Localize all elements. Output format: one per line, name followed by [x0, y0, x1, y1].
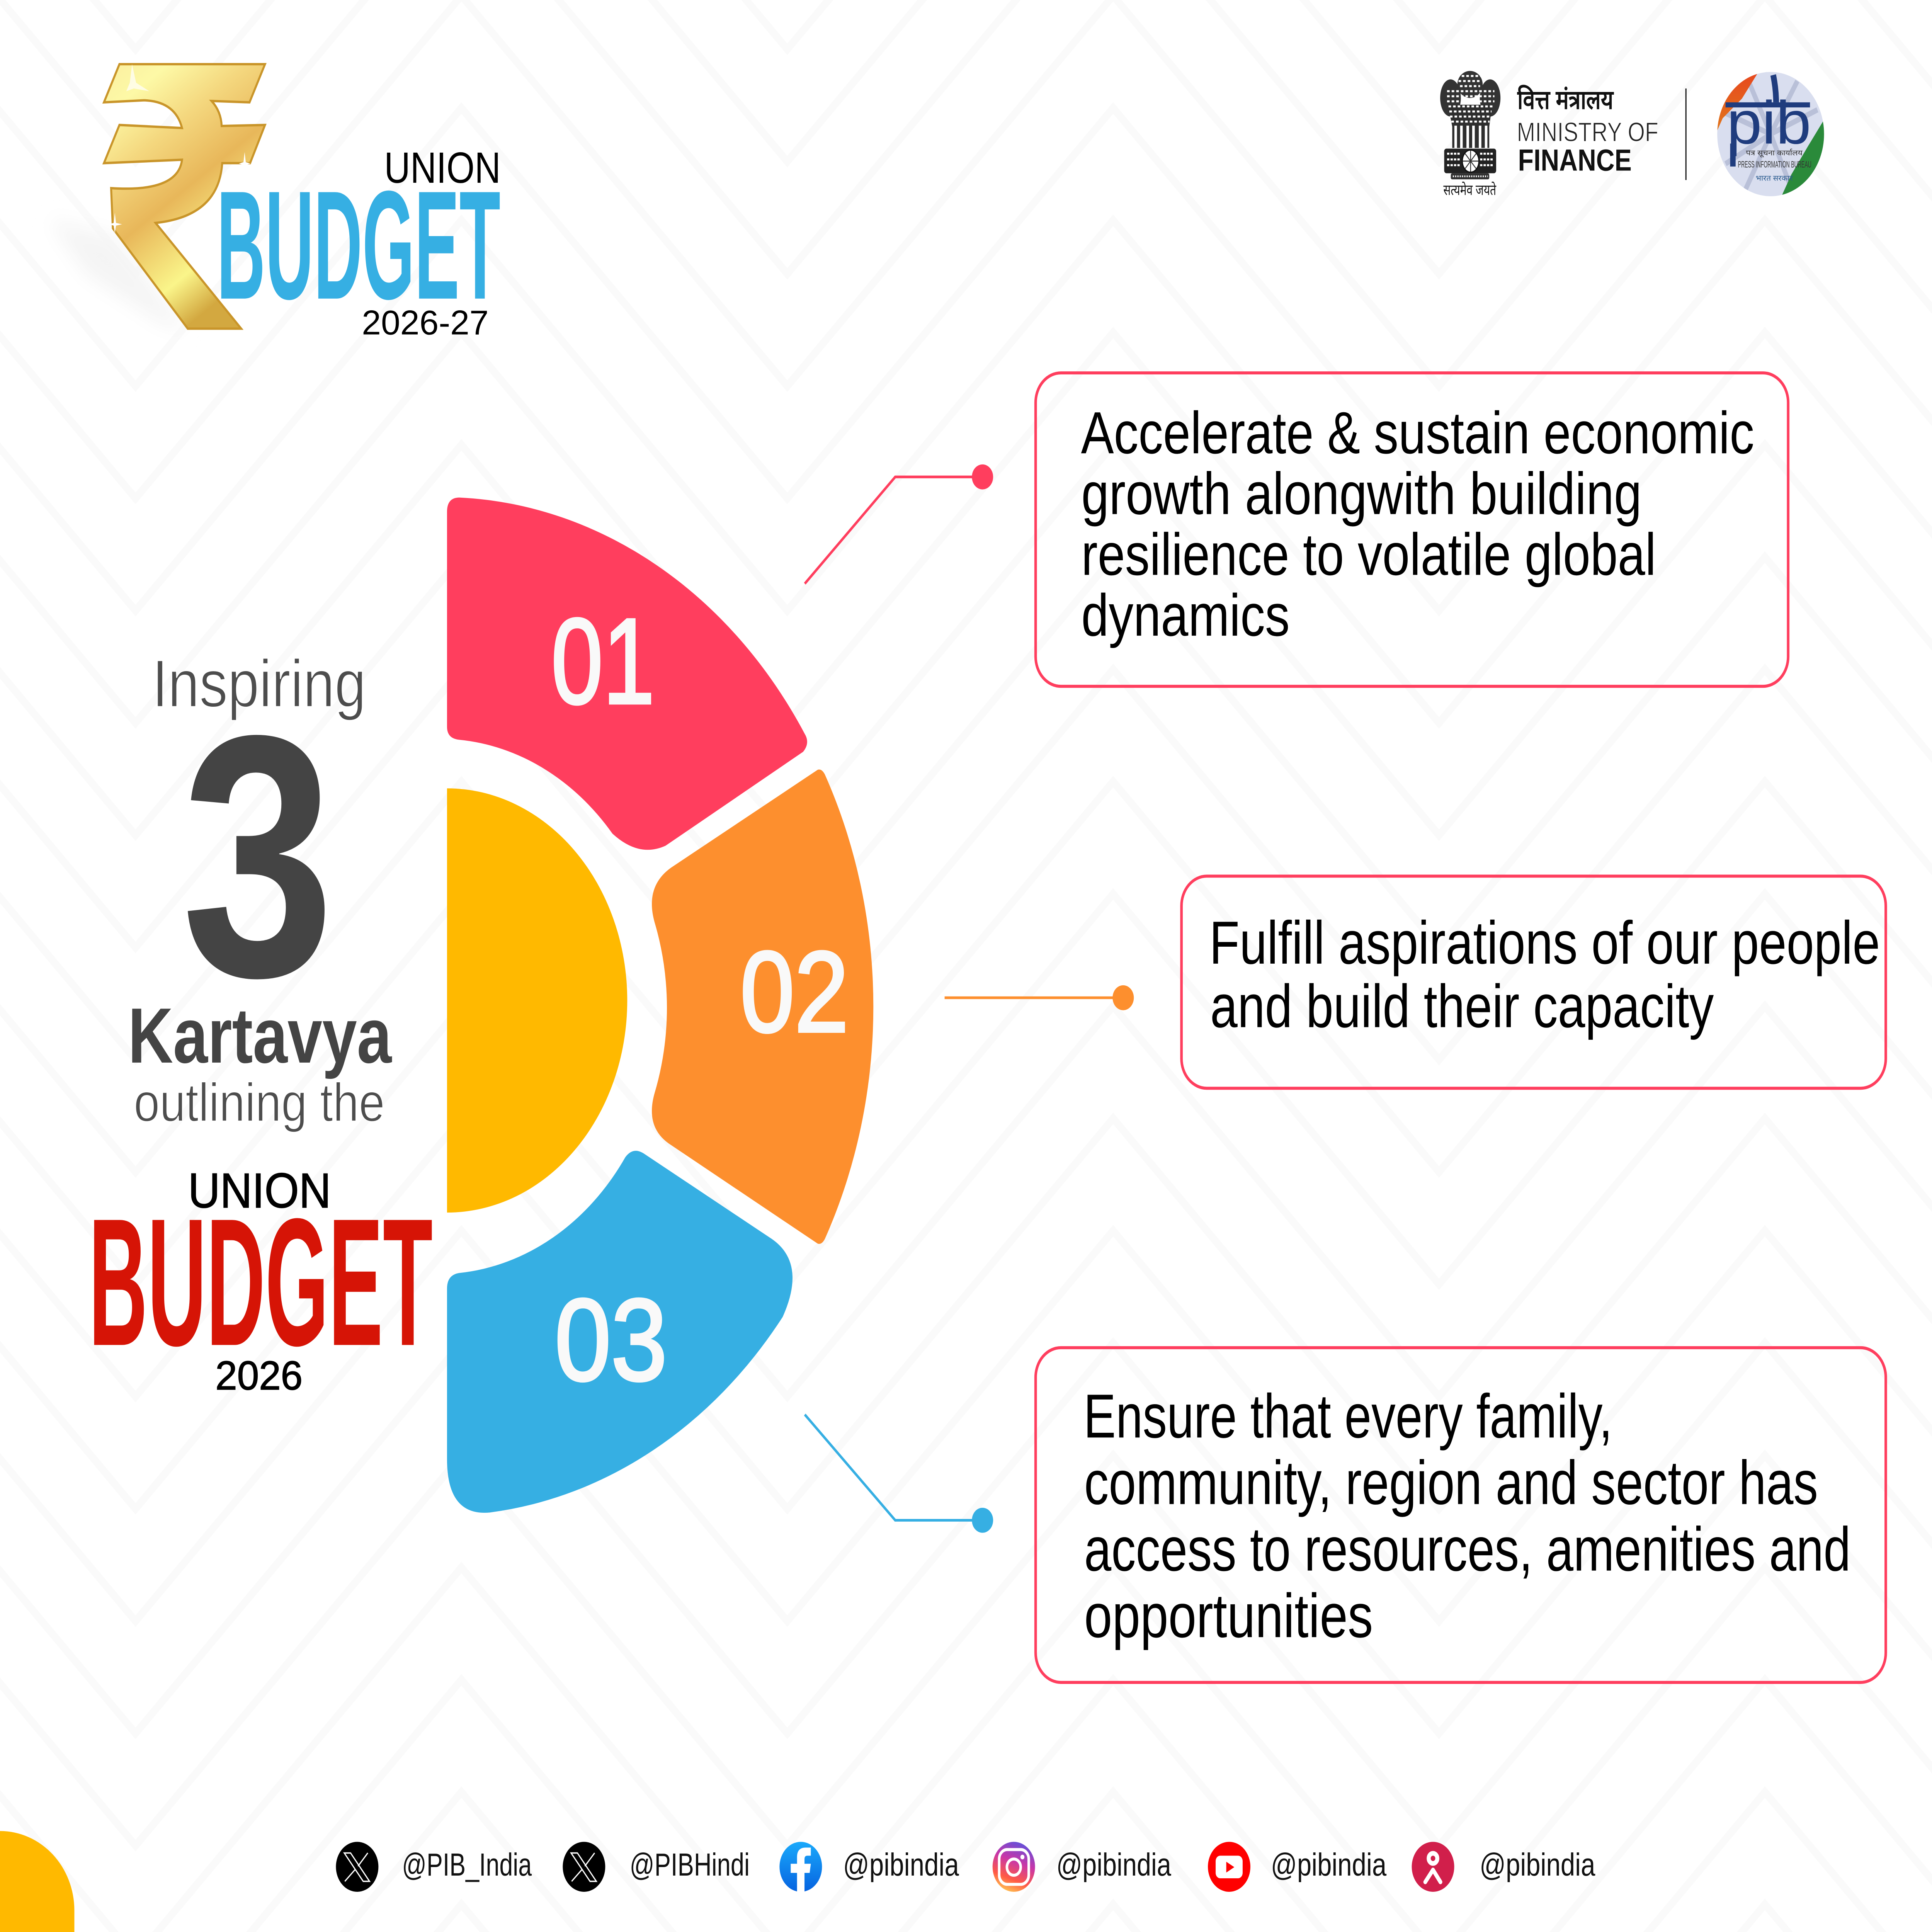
callout: duty 3: Ensure that every family, — [1083, 1381, 1612, 1451]
ministry of label: MINISTRY OF — [1517, 117, 1658, 147]
logo: Union Budget 2026-27 — [49, 64, 501, 342]
callout: duty 3 — [1036, 1348, 1886, 1682]
semicircle diagram — [447, 498, 873, 1513]
icon: national emblem — [1440, 71, 1500, 179]
segment 02: 02 — [740, 928, 849, 1056]
callout: duty 1: dynamics — [1081, 582, 1290, 649]
callout: duty 2 — [1182, 876, 1886, 1088]
icon: X — [563, 1842, 605, 1892]
icon: X — [336, 1842, 378, 1892]
big numeral 3: 3 — [182, 664, 335, 1049]
text: outlining the: outlining the — [134, 1072, 385, 1133]
divider — [1685, 88, 1687, 180]
handle: pibindia: @pibindia — [843, 1847, 959, 1883]
icon: PIB logo: पत्र सूचना कार्यालय — [1746, 149, 1803, 157]
icon: YouTube — [1208, 1842, 1250, 1892]
text: UNION: UNION — [188, 1163, 331, 1218]
callout: duty 1: growth alongwith building — [1081, 461, 1642, 527]
icon: golden rupee symbol — [104, 64, 265, 329]
logo word: BUDGET: BUDGET — [217, 159, 500, 332]
icon: Koo style figure — [1412, 1842, 1454, 1892]
handle: pibindia: @pibindia — [1271, 1847, 1387, 1883]
logo shadow — [49, 219, 187, 329]
handle: PIBHindi: @PIBHindi — [630, 1847, 750, 1883]
emblem motto: सत्यमेव जयते — [1443, 182, 1497, 198]
callout: duty 1: Accelerate & sustain economic — [1081, 400, 1754, 466]
heading: Kartavya: Kartavya — [128, 992, 392, 1079]
yellow core — [447, 788, 627, 1213]
logo word: UNION: UNION — [384, 144, 501, 192]
connector: 01 — [805, 464, 993, 583]
footer corner shape — [0, 1831, 74, 1932]
callout: duty 2: Fulfill aspirations of our people — [1209, 909, 1880, 976]
connector: 03 — [805, 1415, 993, 1533]
handle: pibindia: @pibindia — [1480, 1847, 1595, 1883]
callout: duty 2: and build their capacity — [1210, 972, 1714, 1040]
icon: PIB logo — [1717, 72, 1824, 196]
callout: duty 3: opportunities — [1084, 1581, 1373, 1650]
connector: 02 — [945, 985, 1134, 1010]
logo year: 2026-27 — [362, 303, 489, 342]
logo: Ministry of Finance and PIB — [1440, 68, 1826, 199]
icon: Instagram — [993, 1842, 1035, 1892]
icon: PIB logo: PRESS INFORMATION BUREAU — [1738, 159, 1811, 170]
finance label: FINANCE — [1518, 143, 1632, 177]
left title block — [89, 647, 433, 1398]
ministry name in Hindi: वित्त मंत्रालय — [1517, 85, 1614, 115]
icon: PIB logo: pib — [1727, 88, 1811, 156]
callout: duty 3: community, region and sector has — [1084, 1448, 1818, 1517]
footer social handles — [336, 1842, 1595, 1892]
callout: duty 3: access to resources, amenities and — [1084, 1514, 1851, 1584]
text: BUDGET: BUDGET — [89, 1181, 433, 1384]
handle: PIB_India: @PIB_India — [402, 1847, 532, 1883]
heading: Inspiring: Inspiring — [152, 647, 366, 721]
icon: sparkles — [109, 64, 250, 233]
text: 2026: 2026 — [215, 1353, 303, 1398]
segment 02 — [652, 769, 873, 1244]
segment 01 — [447, 498, 807, 850]
segment 01: 01 — [551, 593, 655, 729]
segment 03: 03 — [555, 1275, 667, 1405]
handle: pibindia: @pibindia — [1056, 1847, 1171, 1883]
callout: duty 1: resilience to volatile global — [1081, 522, 1656, 588]
segment 03 — [447, 1151, 793, 1513]
icon: PIB logo: भारत सरकार — [1756, 174, 1793, 182]
callout: duty 1 — [1036, 373, 1788, 686]
icon: Facebook — [779, 1842, 822, 1892]
